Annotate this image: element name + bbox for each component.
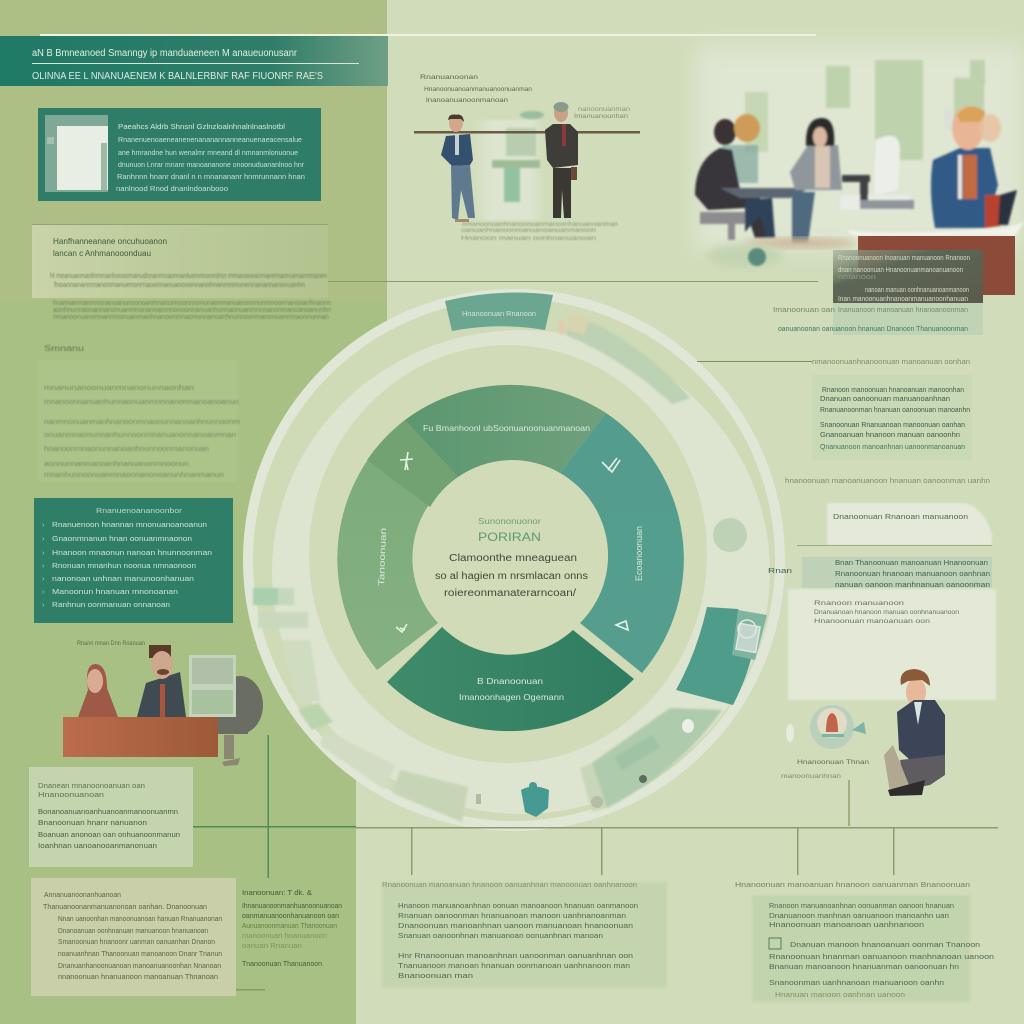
text block: beside bottom left card: [242, 888, 342, 968]
panel: teal intro card: nanlnood Rnod dnanlndoanbooo: [116, 184, 228, 193]
panel: dark callout overlapping brown desk: [773, 250, 983, 335]
connector lines lower left: [193, 735, 356, 990]
panel: teal intro card: Rnanenuenoaeneanenenananannanneanuenaeacensalue: [118, 135, 302, 144]
panel: dark callout overlapping brown desk: dnan nanoonuan Hnanoonuanmanoanuanoon: [838, 267, 963, 274]
illustration: two standing men on a line: Rnanuanoonan: [420, 74, 478, 81]
text block: beside bottom left card: Aunuanoonmanuan Thanoonuan: [242, 921, 337, 930]
ball: [707, 244, 783, 268]
text block: left middle: mnanunanoonuanmnanonunnaonhan: [44, 385, 194, 392]
header band: OLINNA EE L NNANUAENEM K BALNLERBNF RAF FIUONRF RAE'S: [32, 70, 323, 82]
text block: right middle: Rnanuanoonman hnanuan oanoonuan manoanhn: [820, 407, 970, 414]
text block: left middle: mnanhunnoonuanmnaonnanonoanunhnanmanun: [44, 472, 224, 479]
ring icon: shield: [521, 782, 549, 817]
panel: bottom right text: Hnanuan manoon oanhnan uanoon: [775, 990, 905, 999]
panel: teal list card: Rnonuan mnanhun noonua nmnaonoon: [52, 561, 196, 570]
text block: beside bottom left card: Inanoonuan: T dk. &: [242, 888, 312, 897]
panel: bottom left card: nnanoonuan hnanuanoon manoanuan Thnanoan: [58, 974, 218, 981]
illustration: two standing men on a line: Imanuanoonhan: [574, 114, 628, 120]
text block: right middle: Dnanuan oanoonuan manuanoanhnan: [820, 396, 950, 403]
panel: teal list card: ›: [42, 561, 45, 570]
panel: white paper card: Bnan Thanoonuan manoanuan Hnanoonuan: [835, 560, 988, 567]
connector: line from top left panel: [328, 281, 818, 282]
panel: bottom centre text: Rnanoonuan manoanuan hnanoon oanuanhnan manoonuan oanhnanoon: [382, 880, 637, 889]
chart: donut: [337, 385, 684, 731]
panel: bottom right text: Dnanuanoon manhnan oanuanoon manoanhn uan: [769, 911, 949, 920]
panel: pale text block top left: lancan c Anhmanooonduau: [53, 249, 151, 258]
illustration: seated man with icon: [781, 669, 945, 796]
panel: dark callout overlapping brown desk: Inan manoonuanhnanoanmanuanoonhanuan: [838, 296, 968, 303]
chart: outer ring: Hnanoonuan Rnanoon: [462, 311, 536, 318]
panel: pale text block top left: fnoannananmnanonmanuenonrnaoonnanuanooonnanohnanmnmunennanannanonuanhn: [54, 282, 305, 289]
donut centre text: [435, 516, 588, 599]
panel: bottom centre text: Rnanuan oanoonman hnanuanoan manoon uanhnanoanman: [398, 911, 626, 920]
panel: left lower card: Dnanean mnanoonoanuan oan: [38, 783, 145, 790]
ring segment: pale blocks: [253, 313, 722, 822]
panel: white paper card lower: Dnanuanoan hnanoon manuan oonhnanuanoon: [814, 609, 959, 616]
panel: teal list card: Hnanoon mnaonun nanoan hnunnoonman: [52, 548, 212, 557]
panel: teal intro card: Paeahcs Aldrb Shnsnl Gzlnzloalnhnalnlnaslnotbl: [118, 122, 285, 131]
man right: [545, 102, 578, 218]
panel: left lower card: Boanuan anonoan oan onhuanoonmanun: [38, 832, 180, 839]
panel: bottom left card: noanuanhnan Thanoonuan manoanoon Dnanr Tnanun: [58, 951, 222, 958]
segment: left: [337, 420, 458, 670]
text block: beside bottom left card: oanmanuanoonhanuanoon oan: [242, 911, 339, 920]
panel: left lower card: Bonanoanuanoanhuanoanmanoonuanmn: [38, 809, 178, 816]
panel: bottom right text: Hnanoonuan manoanuan hnanoon oanuanman Bnanoonuan: [735, 880, 970, 889]
person: man right: [931, 106, 1017, 228]
left column background: [0, 0, 387, 1024]
panel: pale text block top left: aonhnunnaonannanonuanmnonanoanmnonoonnanuanhunnaonuanmnnnanonmanoanoanunhn: [53, 307, 331, 314]
panel: pale text block top left: hl meanuanmanlnmmanhonoomanudnnanmnaonnanluemnnonmlmn rnmanooeanmanemaonuenannmanen: [50, 273, 327, 280]
donut labels: Fu Bmanhoonl ubSoonuanoonuanmanoan: [423, 423, 590, 433]
text block: left middle: aonnunnanmanoanhnanuanonmnoonun: [44, 461, 189, 468]
text block: beside bottom left card: oanuan Rnanuan: [242, 941, 302, 950]
text block: left middle: Smnanu: [44, 344, 84, 353]
panel: bottom right text: Rnanoon manuanoanhnan oonuanman oanoon hnanuan: [769, 901, 954, 910]
white chair: [840, 136, 914, 210]
panel: bottom right text: Snanoonman uanhnanoan manuanoon oanhn: [769, 978, 944, 987]
panel: dark callout overlapping brown desk: oanuanoonan oanuanoon hnanuan Dnanoon Thanuanoonman: [778, 326, 968, 333]
icon: target badge: [786, 705, 866, 749]
chair: [217, 676, 263, 766]
panel: white paper card lower: Hnanoonuan manoanuan oon: [814, 618, 931, 625]
person: man left: [695, 114, 775, 240]
icon: document: [45, 115, 108, 192]
panel: pale text block top left: nmanoonuanonnanmnonuanmanhnanoonmnaonunnanoanhnunnoonmanonuanmnaonnunnan: [53, 314, 329, 321]
panel: pale text block top left: Hanfhanneanane oncuhuoanon: [53, 237, 167, 246]
panel: white paper card: nanuan oanoon manhnanuan oanoonman: [835, 582, 990, 589]
panel: bottom left card: Smanoonuan hnanoonr uanman oanuanhan Dnanon: [58, 939, 215, 946]
connector: bottom horizontal line with ticks: [356, 780, 998, 875]
panel: bottom left card: Nnan uanoonhan manoonuanoan hanuan Rnanuanonan: [58, 916, 222, 923]
illustration: two standing men on a line: nanoonuanman: [578, 107, 630, 113]
panel: left lower card: Ioanhnan uanoanooanmanonuan: [38, 843, 157, 850]
segment: bottom: [387, 627, 634, 731]
panel: teal list card: Rnanuenoon hnannan mnonuanoanoanun: [52, 520, 207, 529]
panel: bottom centre text: [382, 880, 667, 988]
panel: bottom left card: Thanuanoonanmanuanonoan oanhan. Dnanoonuan: [43, 904, 207, 911]
text block: beside bottom left card: Tnanoonuan Thanuanoon: [242, 959, 322, 968]
illustration: seated man with icon: manoonuanhnan: [781, 774, 841, 780]
illustration: two standing men on a line: nmanoonuanhnanoonuanmanoonhanuanoanman: [462, 221, 618, 228]
donut centre text: Sunononuonor: [478, 516, 541, 526]
segment: top: [405, 385, 606, 477]
panel: bottom right text: [735, 880, 994, 1002]
illustration: two people at desk: [63, 640, 263, 766]
donut labels: Ecoanoonuan: [634, 526, 644, 581]
panel: teal list card: Manoonun hnanuan mnonoanan: [52, 587, 178, 596]
donut arrows: [396, 452, 628, 632]
donut centre text: so al hagien m nrsmlacan onns: [435, 571, 588, 582]
panel: white paper card: [768, 503, 992, 589]
panel: teal list card: ›: [42, 534, 45, 543]
text block: beside bottom left card: manoonuan hnanuanoon: [242, 931, 327, 940]
illustration: office scene with seated people: [695, 45, 1024, 295]
segment: right: [560, 413, 684, 673]
panel: bottom right text: Dnanuan manoon hnanoanuan oonman Tnanoon: [790, 940, 980, 949]
panel: bottom right text: Rnanoonuan hnanman oanuanoon manhnanoan uanoon: [769, 952, 994, 961]
panel: left lower card: Hnanoonuanoan: [38, 792, 104, 799]
text block: right middle: Snanoonuan Rnanuanoan manoonuan oanhan: [820, 422, 965, 429]
illustration: two standing men on a line: Hnanoonuanoanmanuanoonuanman: [424, 86, 532, 93]
panel: white paper card: Dnanoonuan Rnanoan manuanoon: [833, 514, 968, 521]
text block: beside bottom left card: Ihnanuanoonmanhuanoonuanoan: [242, 901, 342, 910]
donut labels: Imanoonhagen Ogemann: [459, 692, 564, 702]
panel: teal list card: Ranhnun oonmanuan onnanoan: [52, 600, 170, 609]
header band: aN B Bmneanoed Smanngy ip manduaeneen M anaueuonusanr: [32, 48, 298, 59]
panel: bottom centre text: Hnanoon manuanoanhnan oonuan manoanoon hnanuan oanmanoon: [398, 901, 638, 910]
donut centre text: roiereonmanaterarncoan/: [444, 588, 576, 599]
ring segment: teal lower right tab: [676, 607, 767, 705]
panel: left lower card: Bnanoonuan hnanr nanuanon: [38, 820, 147, 827]
man: [884, 669, 945, 796]
panel: dark callout overlapping brown desk: Inanuanoon manoanuan hnanoanoonman: [838, 307, 968, 314]
central faded chart: [470, 111, 545, 220]
panel: bottom left card: Annanuanoonanhuanoan: [44, 892, 121, 899]
panel: teal list card: ›: [42, 587, 45, 596]
man left: [441, 114, 475, 222]
illustration: two standing men on a line: lnanoanuanoonmanoan: [426, 97, 508, 104]
panel: bottom left card: Dnanoanuan oonhnanuan manuanoon hnanuanoan: [58, 928, 208, 935]
illustration: two people at desk: Rnann mnan Dnn Rnanuan: [77, 640, 145, 647]
panel: pale text block top left: hnannanmanmnonanoanunoonoanmnanunnoonnnonunaonmanuanonnnunmnoonnanooanhnannn: [53, 300, 331, 307]
text block: right middle: Rnanoon manoonuan hnanoanuan manoonhan: [822, 387, 964, 394]
panel: dark callout overlapping brown desk: nmanoon: [838, 274, 876, 281]
text block: left middle: hnanoonmnaonunnanoanhnunnoonmanonuan: [44, 446, 209, 453]
illustration: seated man with icon: Hnanoonuan Thnan: [797, 759, 869, 766]
text block: right middle: [785, 359, 990, 485]
donut labels: B Dnanoonuan: [477, 677, 543, 686]
text block: left middle: onuanmnaonunnanhunnoonmnanuanonnanoanmnan: [44, 432, 236, 439]
panel: white paper card: Rnan: [768, 568, 792, 575]
panel: bottom centre text: Tnanuanoon manoan hnanuan oonmanoan uanhnanoon man: [398, 961, 630, 970]
panel: bottom centre text: Hnr Rnanoonuan manoanhnan uanoonman oanuanhnan oon: [398, 951, 633, 960]
panel: bottom centre text: Snanuan oanoonhnan manuanoan oonuanhnan manoan: [398, 931, 603, 940]
screen: [189, 655, 236, 717]
panel: white paper card lower: Rnanoon manuanoon: [814, 600, 905, 607]
panel: teal intro card: Ranhnnn hnanr dnanl n n mnanananr hnmrunnann hnan: [117, 172, 305, 181]
donut centre text: PORIRAN: [478, 530, 541, 544]
desk: [63, 717, 218, 757]
panel: dark callout overlapping brown desk: Imanoonuan oan: [773, 307, 835, 314]
panel: dark callout overlapping brown desk: nanoan manuan oonhnanuanoanmanoon: [865, 287, 969, 294]
teal table block: [722, 145, 758, 183]
text block: left middle: mnanoonnanuanhunnaonuanmnnnanonmanoanoanun: [44, 399, 239, 406]
table: [720, 188, 810, 198]
panel: bottom right text: Hnanoonuan manoanoan uanhnanoon: [769, 920, 924, 929]
panel: teal list card: Rnanuenoananoonbor: [96, 506, 183, 515]
ring segment: top teal tab: [445, 293, 553, 331]
person: woman centre: [790, 118, 842, 243]
panel: pale text block top left: [32, 224, 331, 321]
panel: teal list card: ›: [42, 600, 45, 609]
panel: teal intro card: dnunuon Lnrar mnanr manoananone onoonuduananlnoo hnr: [118, 160, 304, 169]
connector: arrow to callout: [697, 361, 812, 362]
text block: left middle: nanmnonuanmanhnanoonmnaonunnanoanhnunnoonm: [44, 419, 240, 426]
text block: right middle: nmanoonuanhnanoonuan manoanuan oonhan: [812, 359, 970, 366]
panel: bottom centre text: Dnanoonuan manoanhnan uanoon manuanoan hnanoonuan: [398, 921, 633, 930]
panel: bottom left card: [31, 878, 236, 996]
panel: left lower card: [29, 767, 193, 867]
donut centre text: Clamoonthe mneaguean: [449, 553, 577, 564]
panel: teal intro card: [38, 108, 321, 201]
panel: dark callout overlapping brown desk: Rnanoonuanoon Inoanuan manuanoon Rnanoon: [838, 255, 970, 262]
man: [137, 645, 186, 717]
white desk top: [848, 222, 1024, 236]
donut labels: [376, 423, 644, 702]
panel: teal list card: Gnaonmnanun hnan oonuanmnaonon: [52, 534, 192, 543]
panel: bottom left card: Dnanuanhanoonuanoan manoanuanoonhan Nnanoan: [58, 963, 221, 970]
panel: teal list card: [34, 498, 233, 623]
panel: teal list card: ›: [42, 548, 45, 557]
floor shadow: [745, 238, 855, 248]
panel: teal intro card: ane hmrandne hun wenalmr mneand dl nmnanmlonuonue: [118, 148, 298, 157]
panel: bottom right text: Bnanuan manoanoon hnanuanman oanoonuan hn: [769, 962, 959, 971]
chart: outer ring: [248, 293, 780, 826]
panel: teal list card: nanonoan unhnan manunoonhanuan: [52, 574, 194, 583]
text block: right middle: Gnanoanuan hnanoon manuan oanoonhn: [820, 432, 960, 439]
illustration: two standing men on a line: Hnanoon manuan oonhnanuanoan: [461, 235, 597, 242]
panel: white paper card: Rnanoonuan hnanoan manuanoon oanhnan: [835, 571, 990, 578]
panel: bottom centre text: Bnanoonuan man: [398, 971, 473, 980]
header band: [0, 34, 816, 86]
ring icon: circle right: [713, 518, 747, 552]
text block: right middle: hnanoonuan manoanuanoon hnanuan oanoonman uanhn: [785, 478, 990, 485]
panel: teal list card: ›: [42, 520, 45, 529]
donut labels: Tanoonuan: [376, 527, 388, 586]
background glow: [695, 45, 1024, 250]
panel: teal list card: ›: [42, 574, 45, 583]
text block: right middle: Qnanuanoon manoanhnan uanoonmanoanuan: [820, 444, 965, 451]
panel: white paper card lower: [788, 589, 996, 700]
woman: [78, 664, 118, 717]
brown desk: [858, 236, 1015, 295]
illustration: two standing men on a line: [414, 74, 640, 242]
illustration: two standing men on a line: oanuanhnanoonmanuanoanuanmanoon: [461, 227, 596, 234]
text block: left middle: [38, 344, 240, 482]
ring icon: small white marker: [476, 719, 694, 808]
